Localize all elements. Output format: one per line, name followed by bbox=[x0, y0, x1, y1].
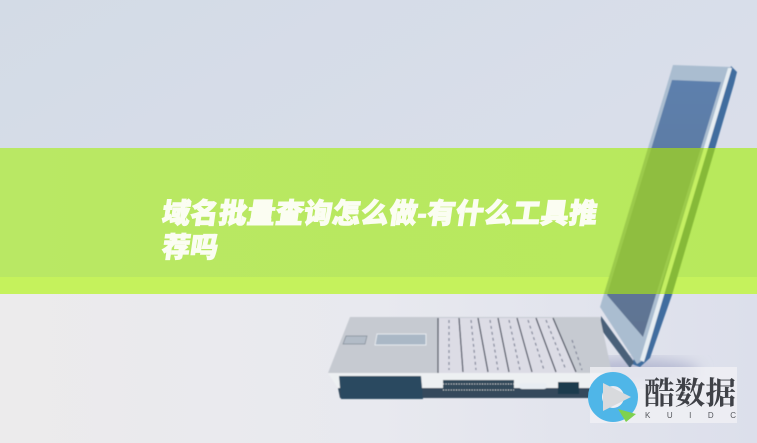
keyboard keys bbox=[449, 320, 582, 370]
keyboard grooves bbox=[438, 318, 576, 373]
title bbox=[160, 198, 599, 263]
laptop screen bbox=[607, 80, 721, 337]
laptop illustration bbox=[328, 65, 737, 399]
laptop seen through band bbox=[604, 148, 716, 294]
title: 域名批量查询怎么做-有什么工具推 bbox=[160, 198, 599, 229]
green title band bbox=[0, 148, 757, 277]
laptop battery bay bbox=[339, 376, 423, 399]
laptop hinge bbox=[600, 316, 634, 368]
watermark logo bbox=[590, 367, 737, 423]
laptop base deck bbox=[328, 317, 612, 373]
laptop front edge bbox=[328, 373, 610, 388]
laptop lid back edge bbox=[632, 66, 737, 367]
laptop port bbox=[558, 382, 579, 394]
logo wordmark: 酷数据 bbox=[644, 376, 736, 411]
tinted back edge bbox=[659, 148, 716, 294]
laptop keyboard bbox=[438, 318, 577, 373]
title: 荐吗 bbox=[160, 232, 220, 263]
laptop lid highlight bbox=[640, 68, 732, 362]
tinted screen bbox=[608, 148, 700, 294]
logo subtitle: KUIDC bbox=[645, 411, 736, 420]
tinted highlight bbox=[660, 148, 708, 294]
laptop shadow bbox=[560, 358, 700, 386]
touchpad buttons bbox=[343, 336, 367, 344]
green band lower strip bbox=[0, 277, 757, 294]
laptop power button bbox=[519, 383, 547, 389]
logo backdrop bbox=[590, 367, 737, 423]
logo play icon bbox=[595, 379, 636, 422]
laptop vent bbox=[443, 380, 514, 392]
laptop lid frame bbox=[600, 65, 731, 364]
touchpad bbox=[375, 334, 426, 345]
laptop front underside bbox=[338, 388, 600, 398]
tinted lid frame bbox=[604, 148, 704, 294]
background floor bbox=[0, 294, 757, 443]
